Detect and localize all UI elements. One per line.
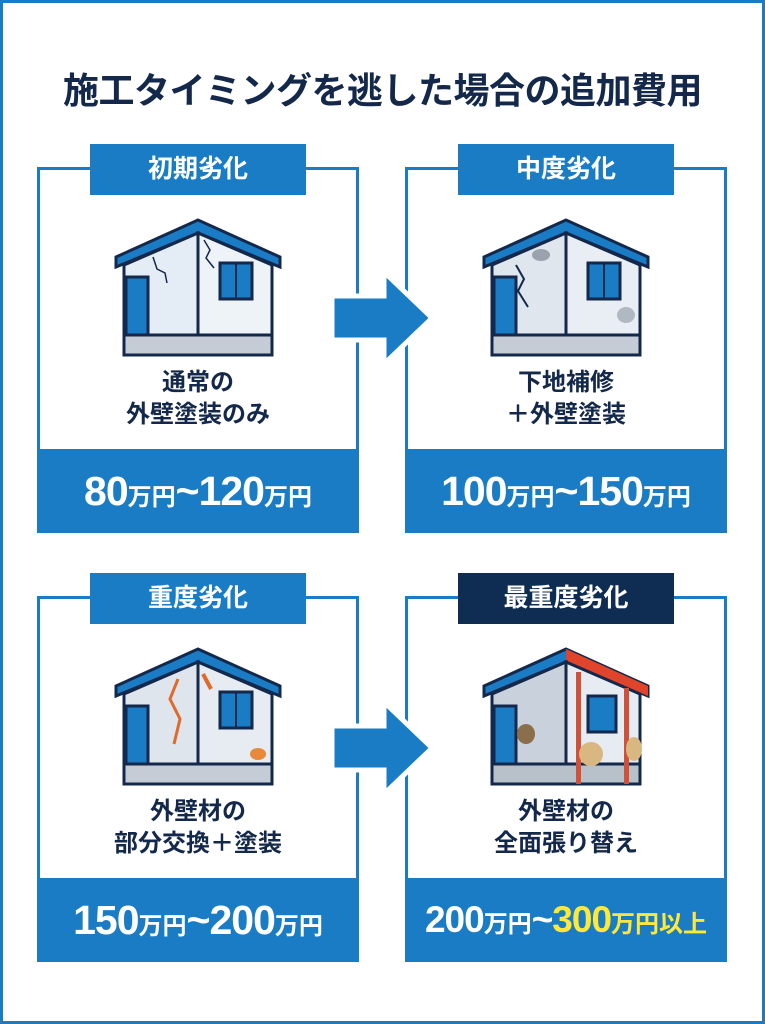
caption moderate: ＋外壁塗装 — [506, 401, 626, 428]
caption severe: 部分交換＋塗装 — [114, 830, 282, 857]
icon: house most severe — [482, 647, 650, 786]
price most severe — [405, 878, 727, 962]
price initial: 80万円~120万円 — [84, 468, 312, 514]
caption initial: 外壁塗装のみ — [126, 401, 270, 428]
price most severe: 200万円~300万円以上 — [425, 899, 707, 940]
panel: initial — [37, 167, 359, 533]
panel: most severe — [405, 596, 727, 962]
arrow: top — [334, 278, 428, 358]
caption most severe: 外壁材の — [518, 798, 614, 825]
arrow: bottom — [334, 708, 428, 788]
caption most severe: 全面張り替え — [494, 830, 638, 857]
caption moderate: 下地補修 — [518, 369, 614, 396]
icon: house moderate — [482, 218, 650, 356]
price severe — [37, 878, 359, 962]
icon: house severe — [114, 647, 282, 786]
label: severe — [90, 573, 306, 624]
caption severe: 外壁材の — [150, 798, 246, 825]
label: moderate — [458, 144, 674, 195]
price severe: 150万円~200万円 — [73, 897, 323, 943]
label: initial: 初期劣化 — [148, 155, 248, 183]
label: most severe: 最重度劣化 — [503, 584, 628, 612]
panel: moderate — [405, 167, 727, 533]
price initial — [37, 449, 359, 533]
price moderate: 100万円~150万円 — [441, 468, 691, 514]
label: severe: 重度劣化 — [148, 584, 248, 612]
price moderate — [405, 449, 727, 533]
title: 施工タイミングを逃した場合の追加費用 — [63, 70, 702, 111]
panel: severe — [37, 596, 359, 962]
caption severe — [114, 798, 282, 857]
caption moderate — [506, 369, 626, 428]
caption initial — [126, 369, 270, 428]
caption most severe — [494, 798, 638, 857]
icon: house initial — [114, 218, 282, 356]
label: initial — [90, 144, 306, 195]
caption initial: 通常の — [162, 369, 234, 396]
label: moderate: 中度劣化 — [516, 155, 616, 183]
label: most severe — [458, 573, 674, 624]
